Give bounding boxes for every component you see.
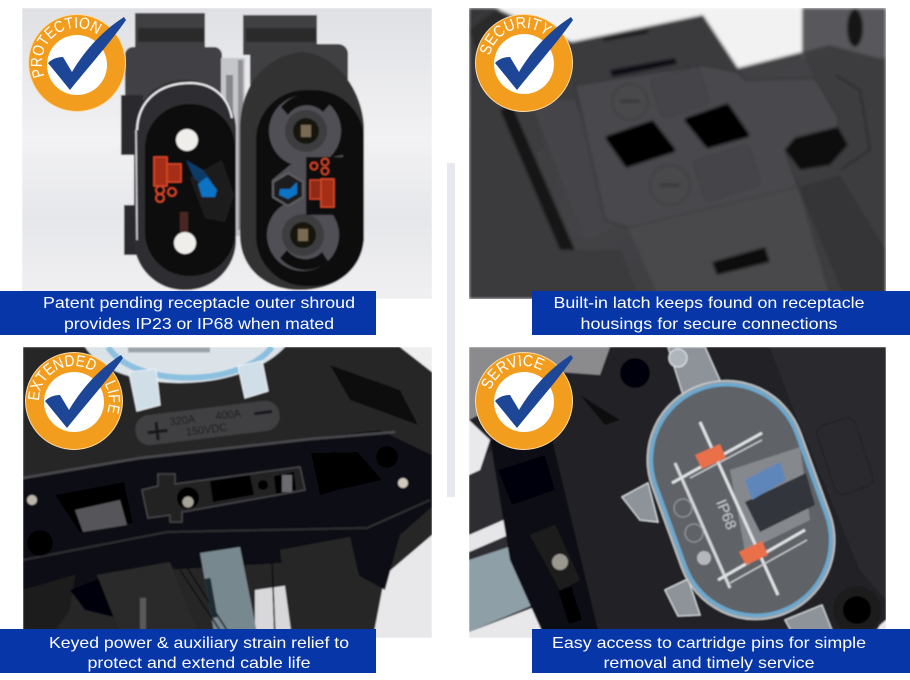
- caption: security: housings for secure connections: [580, 316, 838, 333]
- photo: two connector ends side by side: [22, 8, 432, 299]
- badge: extended life checkmark: [25, 352, 123, 450]
- divider: [447, 163, 455, 497]
- caption: protection: provides IP23 or IP68 when mated: [64, 316, 334, 333]
- caption: protection: [0, 291, 376, 335]
- embossed rating plate: 320A: [169, 413, 197, 429]
- caption: service: removal and timely service: [604, 655, 815, 672]
- panel: service: [469, 347, 910, 673]
- caption: extended life: Keyed power & auxiliary strain relief to: [49, 635, 349, 652]
- clear cover and seal: [85, 347, 285, 383]
- right oval: [240, 52, 364, 290]
- badge: security checkmark: SECURITY: [480, 17, 552, 54]
- caption: extended life: [0, 629, 376, 673]
- badge: extended life checkmark: EXTENDED: [28, 355, 96, 400]
- badge: security checkmark: [475, 14, 573, 112]
- caption: security: Built-in latch keeps found on receptacle: [554, 295, 865, 312]
- caption: protection: Patent pending receptacle outer shroud: [43, 295, 355, 312]
- embossed rating plate: 400A: [215, 408, 242, 423]
- cover ears: [668, 347, 722, 398]
- caption: security: [532, 291, 910, 335]
- photo: clear cartridge cover: IP68: [712, 497, 740, 532]
- photo: clear cartridge cover: [469, 347, 886, 642]
- badge: service checkmark: SERVICE: [482, 355, 545, 388]
- caption: extended life: protect and extend cable life: [88, 655, 311, 672]
- flange: [23, 430, 432, 600]
- badge: protection checkmark: PROTECTION: [30, 17, 102, 78]
- embossed rating plate: 150VDC: [185, 422, 228, 439]
- embossed rating plate: [134, 399, 281, 447]
- panel: extended life: [0, 347, 432, 673]
- left oval: [134, 80, 236, 290]
- badge: extended life checkmark: LIFE: [105, 380, 120, 414]
- photo: strain relief and cables: [23, 347, 432, 638]
- caption: service: Easy access to cartridge pins for simple: [552, 635, 866, 652]
- badge: service checkmark: [475, 352, 573, 450]
- cables: [96, 562, 174, 620]
- badge: protection checkmark: [28, 14, 126, 112]
- cover body and blue seal: [646, 378, 836, 622]
- caption: service: [532, 629, 910, 673]
- panel: protection: [0, 8, 432, 335]
- panel: security: [469, 8, 910, 335]
- photo: built-in latch close-up: [469, 8, 886, 299]
